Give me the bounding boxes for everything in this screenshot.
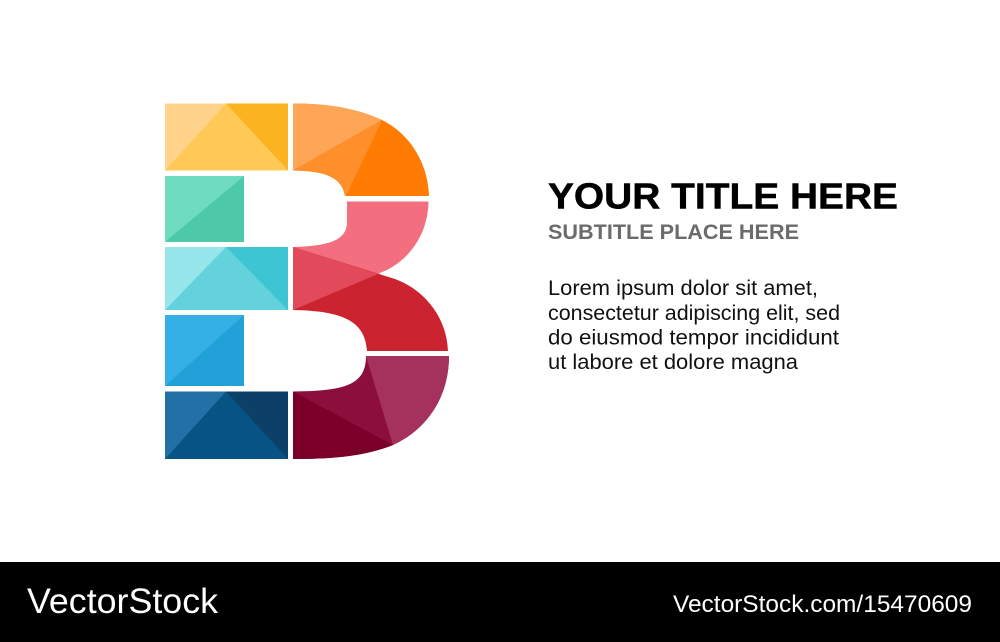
block: navy (165, 392, 288, 459)
body text: do eiusmod tempor incididunt (548, 326, 839, 350)
body text (548, 277, 840, 374)
block: yellow (165, 104, 288, 170)
title: YOUR TITLE HERE (548, 176, 898, 216)
block: cyan (165, 247, 288, 310)
body text: consectetur adipiscing elit, sed (548, 302, 840, 325)
footer logo text: VectorStock (27, 582, 219, 621)
body text: ut labore et dolore magna (548, 351, 798, 374)
footer url: VectorStock.com/15470609 (673, 591, 972, 618)
letter B graphic (165, 104, 449, 459)
curve: orange (293, 104, 429, 196)
body text: Lorem ipsum dolor sit amet, (548, 277, 818, 300)
block: blue (165, 315, 244, 386)
footer bar (0, 562, 1000, 642)
curve: pink (293, 202, 428, 310)
block: green (165, 176, 244, 242)
curve: red (293, 247, 448, 351)
subtitle: SUBTITLE PLACE HERE (548, 221, 799, 244)
curve: maroon (293, 356, 449, 459)
